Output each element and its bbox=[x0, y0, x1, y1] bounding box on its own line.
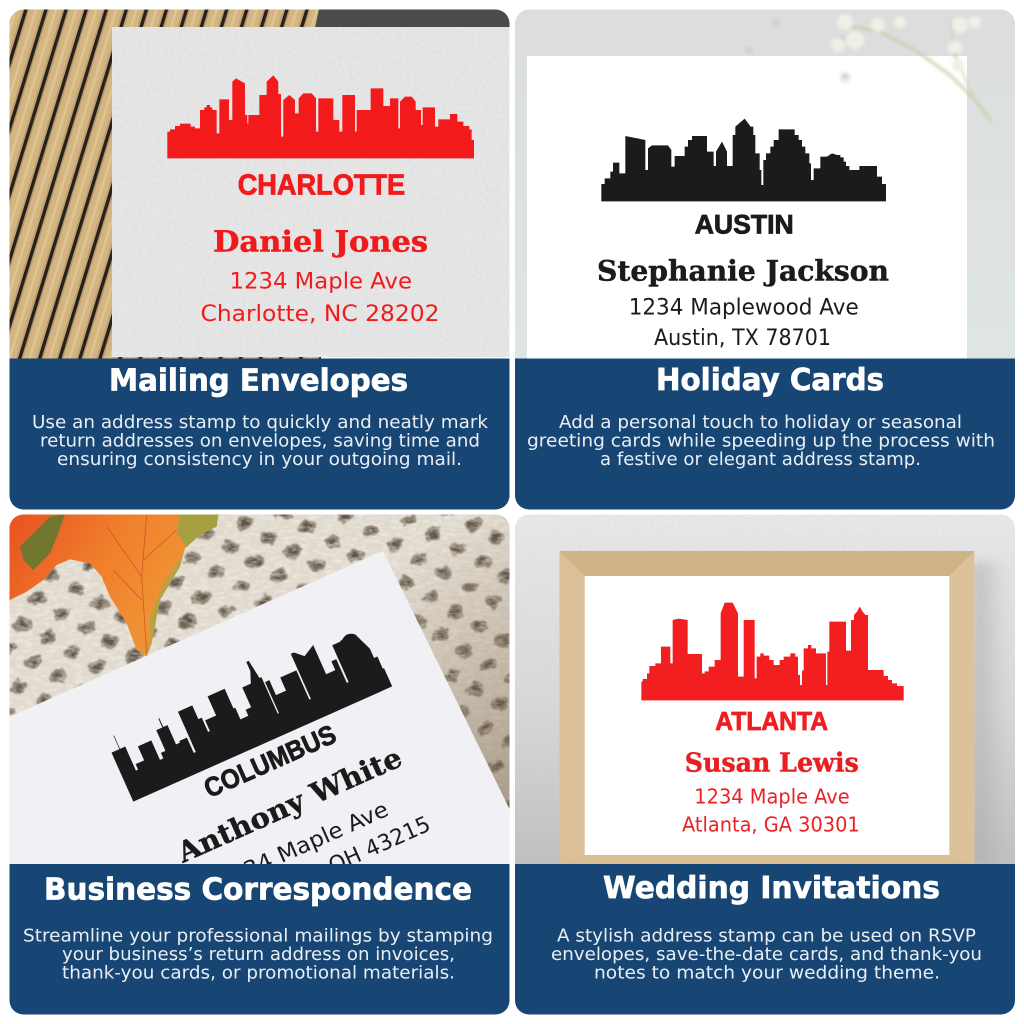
description: Add a personal touch to holiday or seasonal bbox=[559, 412, 962, 433]
description: Streamline your professional mailings by stamping bbox=[23, 926, 493, 947]
description: return addresses on envelopes, saving time and bbox=[40, 431, 480, 452]
city state zip: Columbus, OH 43215 bbox=[214, 812, 435, 928]
photo: red Atlanta stamp in wooden frame bbox=[515, 514, 1015, 865]
wall texture bbox=[515, 514, 1015, 865]
recipient name: Anthony White bbox=[171, 741, 407, 870]
description: greeting cards while speeding up the process with bbox=[527, 431, 995, 452]
caption band bbox=[515, 358, 1015, 510]
description bbox=[32, 412, 489, 470]
city name: COLUMBUS bbox=[200, 719, 341, 804]
caption band bbox=[515, 864, 1015, 1014]
description: notes to match your wedding theme. bbox=[594, 962, 940, 984]
knit blanket background bbox=[10, 514, 510, 809]
description: envelopes, save-the-date cards, and thank-you bbox=[551, 944, 982, 965]
knit fibres bbox=[10, 514, 510, 808]
city state zip: Atlanta, GA 30301 bbox=[682, 813, 860, 837]
street address: 1234 Maple Ave bbox=[230, 269, 412, 294]
street address: 1234 Maple Ave bbox=[213, 797, 392, 895]
skyline: Austin bbox=[601, 119, 886, 201]
photo: black Columbus stamp on tilted card bbox=[10, 514, 510, 864]
baby's breath sprig bbox=[745, 14, 992, 122]
description bbox=[23, 926, 493, 984]
photo: red Charlotte stamp on paper bbox=[9, 9, 510, 359]
panel: mailing envelopes bbox=[9, 9, 510, 510]
street address: 1234 Maple Ave bbox=[694, 784, 850, 808]
heading: Holiday Cards bbox=[656, 363, 884, 398]
concrete wall bbox=[515, 514, 1015, 865]
skyline: Columbus bbox=[112, 634, 392, 802]
autumn leaf bbox=[7, 514, 218, 657]
recipient name: Daniel Jones bbox=[213, 225, 428, 259]
skyline: Atlanta bbox=[641, 603, 904, 700]
recipient name: Stephanie Jackson bbox=[597, 255, 889, 288]
description: a festive or elegant address stamp. bbox=[600, 449, 921, 470]
white print bbox=[585, 576, 949, 855]
frame shadow bbox=[974, 560, 999, 862]
heading: Business Correspondence bbox=[44, 872, 472, 907]
city state zip: Charlotte, NC 28202 bbox=[200, 302, 440, 327]
panel: wedding invitations bbox=[515, 514, 1015, 1014]
street address: 1234 Maplewood Ave bbox=[629, 295, 859, 320]
paper texture bbox=[112, 27, 510, 357]
panel: holiday cards bbox=[515, 9, 1015, 510]
skyline: Charlotte bbox=[167, 75, 474, 158]
photo: black Austin stamp on white card bbox=[515, 9, 1015, 359]
wooden frame bbox=[560, 551, 974, 865]
wood slat background bbox=[9, 9, 321, 359]
knit shading bbox=[403, 520, 510, 808]
heading: Wedding Invitations bbox=[603, 871, 940, 906]
panel: business correspondence bbox=[0, 495, 530, 1014]
recipient name: Susan Lewis bbox=[685, 749, 859, 779]
description: Use an address stamp to quickly and neatly mark bbox=[32, 412, 489, 433]
description: ensuring consistency in your outgoing mail. bbox=[57, 449, 462, 470]
caption band bbox=[10, 864, 510, 1014]
description: thank-you cards, or promotional materials. bbox=[62, 962, 455, 984]
description bbox=[551, 926, 982, 984]
city name: ATLANTA bbox=[715, 708, 828, 736]
city name: AUSTIN bbox=[695, 209, 794, 239]
heading: Mailing Envelopes bbox=[109, 364, 408, 399]
paper card bbox=[112, 27, 510, 357]
white card bbox=[527, 56, 967, 359]
description bbox=[527, 412, 995, 470]
white card bbox=[9, 551, 510, 865]
city state zip: Austin, TX 78701 bbox=[654, 326, 831, 351]
description: your business’s return address on invoices, bbox=[62, 944, 455, 965]
dark surface at top right bbox=[315, 9, 510, 28]
city name: CHARLOTTE bbox=[238, 169, 405, 201]
description: A stylish address stamp can be used on RSVP bbox=[557, 926, 976, 947]
grey backdrop bbox=[515, 9, 1015, 359]
caption band bbox=[10, 358, 510, 510]
